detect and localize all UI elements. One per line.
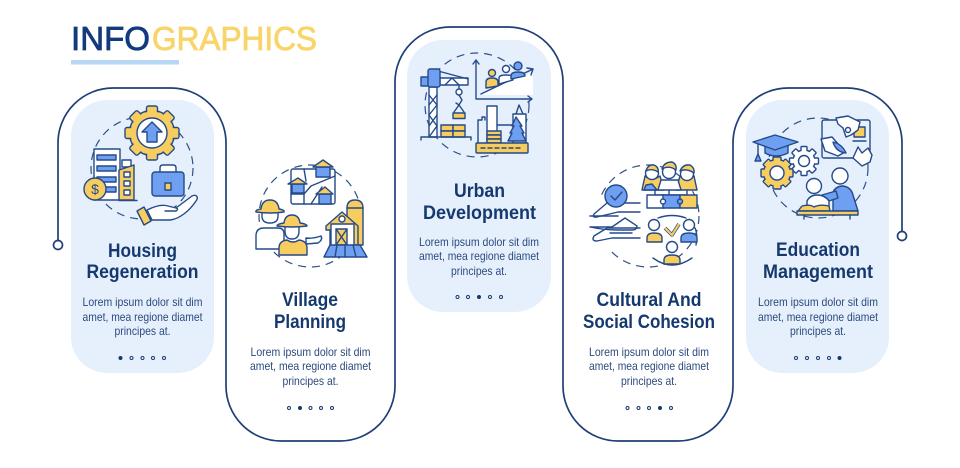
icon: cultural and social cohesion [588,162,699,267]
panel: cultural and social cohesion [583,162,715,410]
body text: amet, mea regione diamet [250,359,372,373]
body text: amet, mea regione diamet [82,310,203,324]
heading line two: Planning [274,311,346,333]
body text [82,295,203,338]
panel: housing regeneration [82,106,203,360]
heading line two: Management [763,261,873,283]
panel background: housing regeneration [71,100,214,373]
heading line two: Regeneration [86,261,198,283]
body text: principes at. [451,264,507,278]
body text: principes at. [114,324,170,338]
title: GRAPHICS [152,20,317,57]
body text [758,295,879,338]
panel background: urban development [407,40,551,312]
body text: amet, mea regione diamet [419,249,540,263]
title underline [71,60,179,64]
icon: housing regeneration: $ [91,181,99,197]
body text [419,235,540,278]
body text: principes at. [282,374,338,388]
heading: housing regeneration: Housing [108,240,177,262]
body text: Lorem ipsum dolor sit dim [589,345,709,359]
body text: Lorem ipsum dolor sit dim [250,345,370,359]
panel background: education management [746,100,889,373]
heading: education management: Education [776,239,860,261]
body text [589,345,710,388]
pagination dots [456,296,502,298]
icon: education management [753,116,872,219]
panel: urban development [419,53,540,298]
title: INFO [71,20,150,57]
body text: principes at. [621,374,677,388]
body text: Lorem ipsum dolor sit dim [419,235,539,249]
title [71,20,317,57]
heading line two: Social Cohesion [583,311,715,333]
heading: village planning: Village [282,289,338,311]
body text: Lorem ipsum dolor sit dim [82,295,202,309]
heading: urban development: Urban [454,180,505,202]
body text [250,345,372,388]
heading line two: Development [423,202,536,224]
body text: Lorem ipsum dolor sit dim [758,295,878,309]
pagination dots [794,356,841,360]
serpentine connector outline [54,27,906,441]
panel: education management [753,116,879,360]
panel: village planning [250,160,372,410]
icon: housing regeneration [84,106,197,225]
icon: urban development [421,53,533,157]
body text: amet, mea regione diamet [758,310,879,324]
body text: principes at. [790,324,846,338]
icon: village planning [256,160,367,267]
body text: amet, mea regione diamet [589,359,710,373]
heading: cultural and social cohesion: Cultural And [596,289,702,311]
pagination dots [288,406,334,410]
pagination dots [119,356,166,360]
pagination dots [626,406,672,410]
